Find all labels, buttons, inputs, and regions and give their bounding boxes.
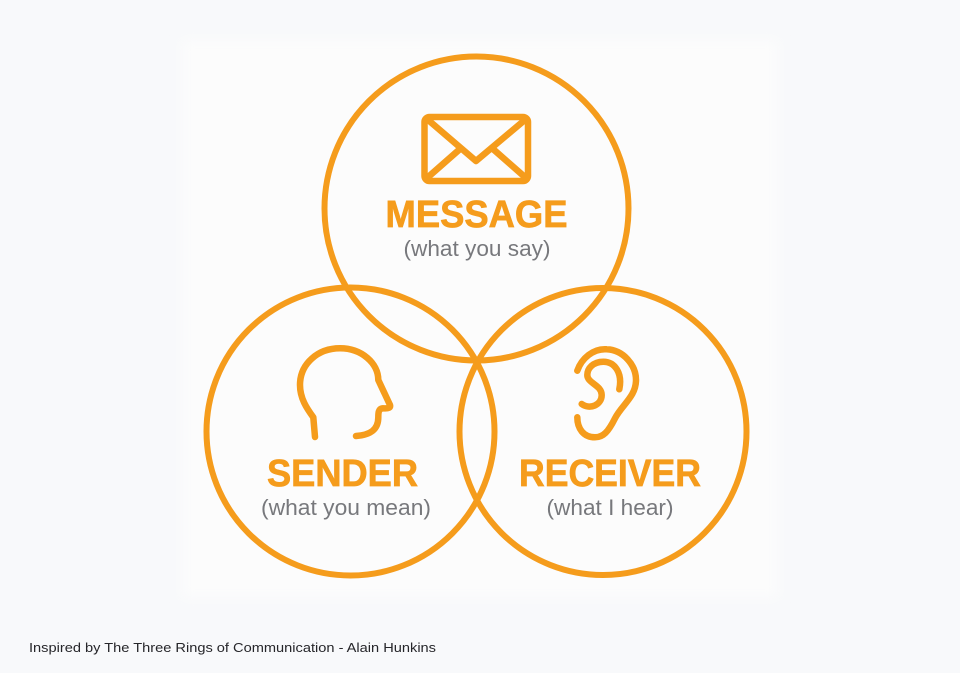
icon: ear	[577, 349, 636, 437]
attribution: Inspired by The Three Rings of Communication - Alain Hunkins	[29, 640, 437, 655]
icon: envelope	[424, 117, 528, 181]
ring: sender	[206, 288, 494, 576]
heading: sender: SENDER	[267, 453, 418, 495]
heading: message: MESSAGE	[386, 194, 568, 236]
ring: receiver	[460, 288, 746, 575]
heading: receiver: RECEIVER	[519, 453, 701, 495]
subtitle: what you say: (what you say)	[404, 236, 550, 261]
subtitle: what you mean: (what you mean)	[261, 495, 431, 520]
icon: head	[300, 348, 390, 437]
subtitle: what I hear: (what I hear)	[546, 495, 674, 520]
ring: message	[324, 56, 628, 360]
